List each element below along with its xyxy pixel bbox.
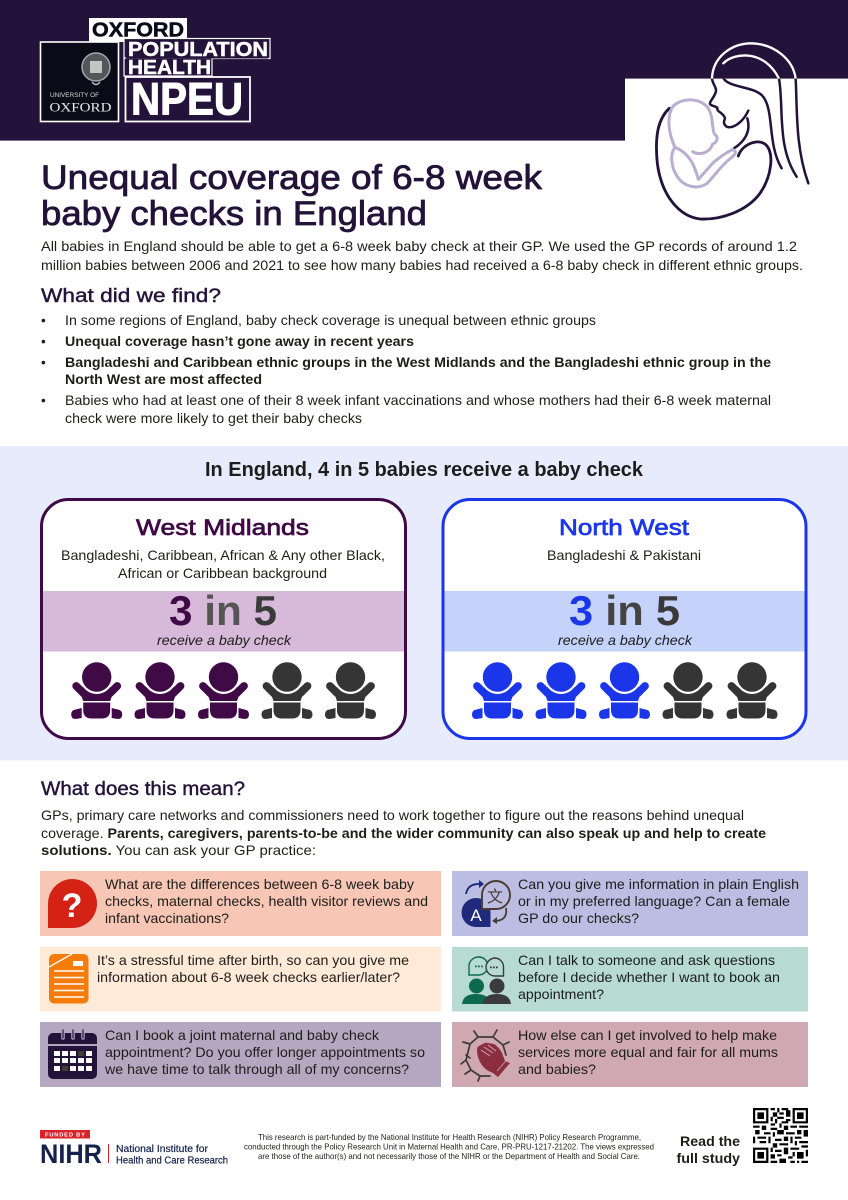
question box: get involved: How else can I get involved to help make xyxy=(518,1027,777,1043)
logo: NIHR funded by: Health and Care Research xyxy=(116,1156,228,1166)
question box: plain English: GP do our checks? xyxy=(518,910,639,926)
question box: joint appointment: Can I book a joint maternal and baby check xyxy=(105,1027,380,1043)
heading: what did we find: What did we find? xyxy=(41,286,221,307)
question box: stressful time: information about 6-8 week checks earlier/later? xyxy=(97,969,400,985)
funding disclaimer: This research is part-funded by the National Institute for Health Research (NIHR) Policy Research Programme, xyxy=(258,1132,641,1142)
findings bullet list xyxy=(41,313,771,426)
logo: NIHR funded by: National Institute for xyxy=(116,1144,209,1155)
read the full study label xyxy=(676,1133,740,1166)
question box: differences between checks: infant vaccinations? xyxy=(105,910,229,926)
QR code xyxy=(753,1108,808,1163)
card: North West: North West xyxy=(559,515,690,540)
question box: talk to someone xyxy=(452,947,808,1012)
icon: question mark bubble: ? xyxy=(62,887,82,925)
icon: translation xyxy=(462,880,510,927)
logo: Oxford Population Health NPEU: NPEU xyxy=(131,74,243,124)
intro text xyxy=(41,238,803,273)
heading: in England 4 in 5: In England, 4 in 5 babies receive a baby check xyxy=(205,459,644,481)
logo: Oxford Population Health NPEU: POPULATION xyxy=(128,39,268,61)
card: North West: Bangladeshi & Pakistani xyxy=(547,547,701,563)
question box: talk to someone: appointment? xyxy=(518,986,604,1002)
heading: what does this mean: What does this mean? xyxy=(41,779,245,800)
card: West Midlands: Bangladeshi, Caribbean, African & Any other Black, xyxy=(61,547,385,563)
icon: mother and baby xyxy=(656,43,808,219)
question box: get involved: and babies? xyxy=(518,1061,596,1077)
intro text: million babies between 2006 and 2021 to see how many babies had received a 6-8 baby check in different ethnic groups. xyxy=(41,257,803,273)
question box: get involved xyxy=(452,1022,808,1087)
logo: Oxford Population Health NPEU: OXFORD xyxy=(92,20,184,42)
question box: plain English: or in my preferred language? Can a female xyxy=(518,893,790,909)
icon: calendar xyxy=(48,1030,97,1079)
logo: Oxford Population Health NPEU: UNIVERSITY OF xyxy=(50,92,99,99)
what does this mean paragraph: GPs, primary care networks and commissioners need to work together to figure out the reasons behind unequal xyxy=(41,807,744,823)
read the full study label: Read the xyxy=(680,1133,740,1149)
read the full study label: full study xyxy=(676,1150,740,1166)
icon: document xyxy=(49,954,88,1004)
question box: plain English xyxy=(452,871,808,936)
findings bullet list: North West are most affected xyxy=(65,372,262,387)
logo: NIHR funded by xyxy=(40,1130,228,1169)
logo: NIHR funded by: NIHR xyxy=(40,1139,102,1169)
question box: differences between checks: What are the differences between 6-8 week baby xyxy=(105,876,414,892)
icon: question mark bubble xyxy=(48,879,97,928)
question box: talk to someone: before I decide whether I want to book an xyxy=(518,969,780,985)
card: West Midlands: receive a baby check xyxy=(157,632,292,648)
logo: Oxford Population Health NPEU xyxy=(40,18,270,124)
question box: differences between checks: checks, maternal checks, health visitor reviews and xyxy=(105,893,428,909)
funding disclaimer xyxy=(244,1132,654,1161)
question box: joint appointment: we have time to talk through all of my concerns? xyxy=(104,1061,409,1077)
question box: stressful time xyxy=(40,947,441,1012)
funding disclaimer: are those of the author(s) and not necessarily those of the NIHR or the Department of Health and Social Care. xyxy=(258,1151,640,1161)
card: West Midlands: African or Caribbean background xyxy=(118,565,327,581)
findings bullet list: Unequal coverage hasn’t gone away in recent years xyxy=(65,334,414,349)
logo: Oxford Population Health NPEU: OXFORD xyxy=(50,100,112,114)
what does this mean paragraph xyxy=(41,807,766,858)
question box: get involved: services more equal and fair for all mums xyxy=(518,1044,778,1060)
question box: differences between checks xyxy=(40,871,441,936)
icon: translation: 文 xyxy=(487,888,503,906)
intro text: All babies in England should be able to get a 6-8 week baby check at their GP. We used the GP records of around 1.2 xyxy=(41,238,797,254)
question box: stressful time: It’s a stressful time after birth, so can you give me xyxy=(97,952,409,968)
findings bullet list: • xyxy=(41,355,46,370)
question box: talk to someone: Can I talk to someone and ask questions xyxy=(518,952,775,968)
findings bullet list: • xyxy=(41,313,46,328)
title xyxy=(41,159,543,233)
question box: joint appointment: appointment? Do you offer longer appointments so xyxy=(105,1044,425,1060)
findings bullet list: Bangladeshi and Caribbean ethnic groups in the West Midlands and the Bangladeshi ethnic group in the xyxy=(65,355,771,370)
findings bullet list: Babies who had at least one of their 8 week infant vaccinations and whose mothers had their 6-8 week maternal xyxy=(65,393,771,408)
findings bullet list: check were more likely to get their baby checks xyxy=(65,411,362,426)
what does this mean paragraph: solutions. You can ask your GP practice: xyxy=(41,842,316,858)
card: North West: 3 in 5 xyxy=(569,587,680,634)
icon: translation: A xyxy=(470,906,482,925)
findings bullet list: • xyxy=(41,393,46,408)
question box: joint appointment xyxy=(40,1022,441,1087)
question box: plain English: Can you give me information in plain English xyxy=(518,876,799,892)
header band xyxy=(0,0,848,142)
icon: hand on brick wall xyxy=(461,1030,510,1081)
title: baby checks in England xyxy=(41,195,427,233)
card: West Midlands xyxy=(42,500,406,738)
card: West Midlands: West Midlands xyxy=(136,515,309,540)
findings bullet list: • xyxy=(41,334,46,349)
findings bullet list: In some regions of England, baby check coverage is unequal between ethnic groups xyxy=(65,313,596,328)
logo: NIHR funded by: FUNDED BY xyxy=(45,1133,85,1139)
card: North West xyxy=(443,500,806,738)
what does this mean paragraph: coverage. Parents, caregivers, parents-to-be and the wider community can also speak up and help to create xyxy=(41,825,766,841)
title: Unequal coverage of 6-8 week xyxy=(41,159,543,197)
icon: two people talking xyxy=(462,957,511,1004)
panel: regional statistics xyxy=(0,446,848,760)
card: West Midlands: 3 in 5 xyxy=(169,587,277,634)
logo: Oxford Population Health NPEU: HEALTH xyxy=(128,57,211,79)
card: North West: receive a baby check xyxy=(558,632,693,648)
funding disclaimer: conducted through the Policy Research Unit in Maternal Health and Care, PR-PRU-1217-21202. The views expressed xyxy=(244,1142,654,1152)
